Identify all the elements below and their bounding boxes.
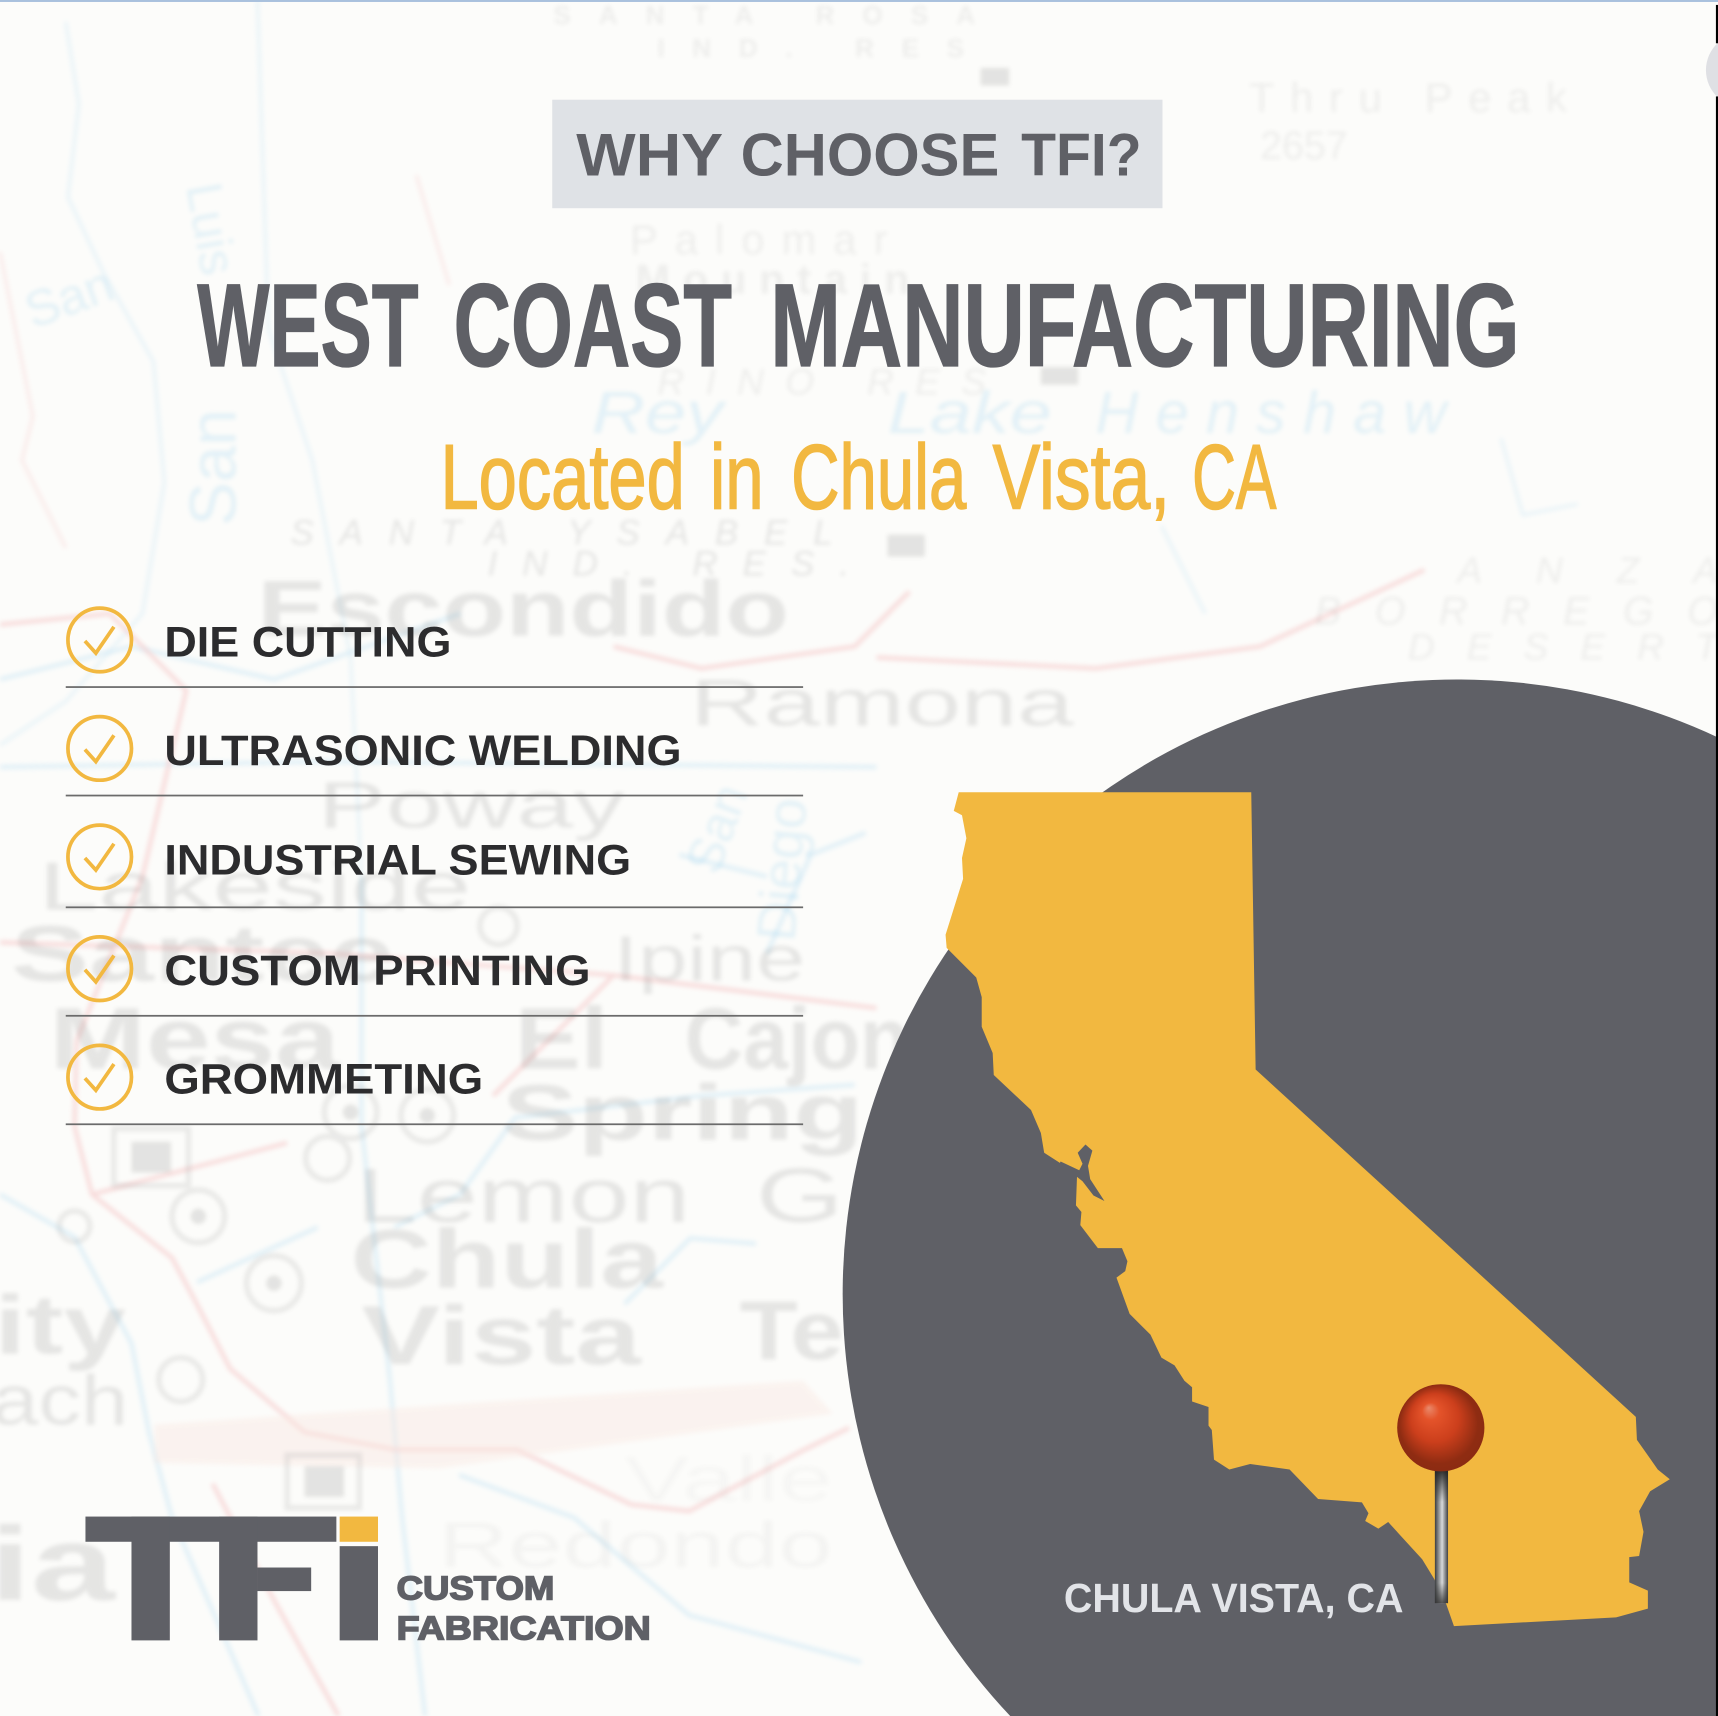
map labels: Cajon (685, 989, 909, 1087)
upper map labels: DESERT (1408, 626, 1718, 668)
list item: die cutting (66, 608, 803, 688)
list item: custom printing: CUSTOM PRINTING (164, 947, 591, 995)
subheading: in (710, 425, 764, 528)
upper map labels (553, 0, 1718, 668)
upper map labels: IND. RES (657, 33, 964, 63)
main heading (197, 260, 1520, 392)
logo wordmark (397, 1569, 651, 1646)
map labels: El (515, 989, 608, 1087)
map water labels: Henshaw (1096, 379, 1450, 446)
upper map labels: BORREGO (1315, 590, 1718, 634)
subheading: Chula (791, 425, 967, 528)
list item: custom printing (66, 937, 803, 1017)
list item: industrial sewing (66, 825, 803, 908)
subheading (440, 425, 1277, 528)
map labels: Ramona (690, 665, 1074, 739)
San Francisco bay (1060, 1145, 1104, 1201)
map water labels: San (674, 777, 759, 880)
map labels: G (756, 1154, 844, 1239)
subheading: Located (440, 425, 685, 528)
map pin (1397, 1384, 1484, 1603)
list item: grommeting (66, 1045, 803, 1125)
map labels: Chula (351, 1213, 664, 1306)
list item: ultrasonic welding (66, 717, 803, 796)
map labels (0, 514, 1074, 1623)
top edge line (0, 0, 1718, 2)
logo wordmark: CUSTOM (397, 1569, 554, 1606)
map labels: Santee (11, 910, 394, 998)
title tag: why choose TFI: CHOOSE (741, 120, 999, 188)
upper map labels: Palomar (630, 216, 888, 263)
map water labels: Luis (175, 178, 248, 279)
list item: grommeting: GROMMETING (164, 1056, 483, 1104)
title tag: why choose TFI: WHY (576, 120, 723, 188)
map labels: Lakeside (38, 849, 471, 925)
title tag: why choose TFI (552, 100, 1162, 208)
panel: services checklist (66, 608, 803, 1125)
upper map labels: SANTA ROSA (553, 0, 975, 30)
main heading: WEST (197, 260, 419, 392)
title tag: why choose TFI: TFI? (1021, 120, 1142, 188)
map roads (0, 570, 1424, 1716)
upper map labels: Mountain (635, 256, 909, 303)
list item: industrial sewing: INDUSTRIAL SEWING (164, 836, 631, 884)
map rivers (0, 614, 877, 1716)
list item: die cutting: DIE CUTTING (164, 618, 451, 666)
map labels: Te (740, 1284, 844, 1377)
logo mark (85, 1517, 378, 1640)
map water labels: San (17, 255, 121, 339)
map water labels (17, 178, 1450, 943)
map water labels: Lake (887, 379, 1052, 446)
logo: TFI custom fabrication (85, 1517, 651, 1646)
map labels: IND. RES. (488, 544, 849, 583)
panel: location circle (843, 679, 1718, 1716)
map labels: Ipine (614, 924, 805, 995)
map labels: Escondido (257, 565, 789, 653)
map labels: Redondo (438, 1510, 833, 1581)
list item: ultrasonic welding: ULTRASONIC WELDING (164, 727, 682, 775)
subheading: CA (1192, 425, 1277, 528)
upper map rivers (0, 0, 1578, 877)
map water labels: San (176, 409, 250, 526)
map water labels: Rey (592, 379, 727, 446)
map labels: Vista (362, 1289, 642, 1382)
map labels: Poway (318, 767, 625, 841)
map labels: Spring (502, 1069, 863, 1157)
subheading: Vista, (993, 425, 1170, 528)
California map (946, 792, 1670, 1626)
upper map labels: RINO RES (657, 360, 986, 402)
upper map labels: 2657 (1260, 124, 1348, 168)
map labels: Mesa (49, 989, 341, 1087)
upper map labels: Thru Peak (1249, 74, 1567, 121)
upper map roads (0, 175, 449, 548)
upper map labels: ANZA (1455, 549, 1718, 591)
map labels: Lemon (356, 1154, 690, 1239)
map labels: SANTA YSABEL (290, 514, 833, 553)
map labels: Valle (625, 1444, 833, 1515)
logo wordmark: FABRICATION (397, 1609, 651, 1646)
main heading: COAST (454, 260, 732, 392)
map pink band (154, 1381, 833, 1468)
location label: CHULA VISTA, CA (1064, 1575, 1404, 1621)
map water labels: Diego (745, 795, 819, 943)
screen edge artefacts (1706, 5, 1718, 1716)
map markers (59, 68, 1078, 1508)
